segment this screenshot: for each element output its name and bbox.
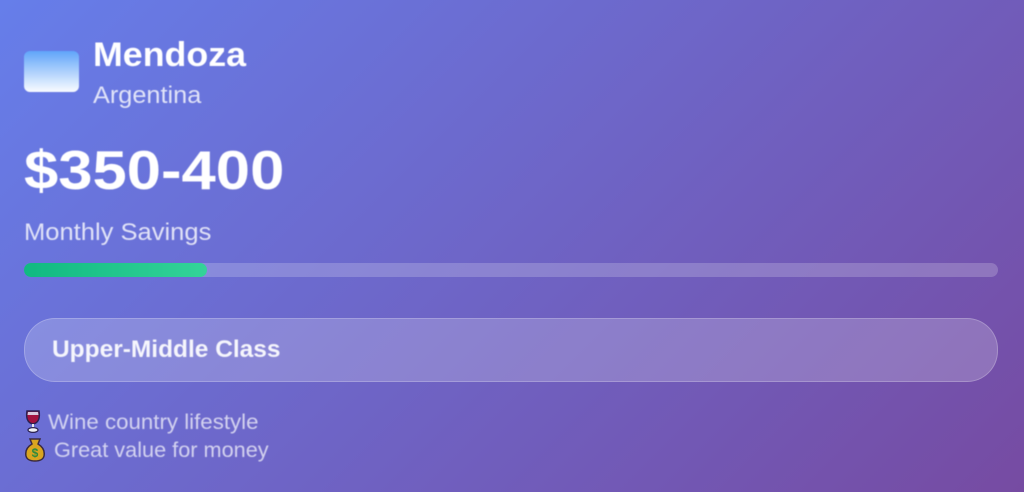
badge: class tier xyxy=(24,318,998,382)
icon: money bag xyxy=(25,438,45,462)
label: monthly savings: Monthly Savings xyxy=(24,219,211,246)
subheading: country: Argentina xyxy=(93,82,201,109)
heading: city name: Mendoza xyxy=(93,36,246,74)
badge label: Upper-Middle Class xyxy=(52,336,281,363)
text: great value: Great value for money xyxy=(54,439,269,462)
icon: money bag: $ xyxy=(32,446,39,460)
icon: wine glass xyxy=(26,410,40,433)
feature list xyxy=(25,410,269,462)
icon: location image placeholder xyxy=(24,51,79,92)
progress bar fill xyxy=(24,263,207,277)
stat: savings amount: $350-400 xyxy=(24,139,284,201)
text: wine country: Wine country lifestyle xyxy=(48,411,259,434)
progress bar xyxy=(24,263,998,277)
